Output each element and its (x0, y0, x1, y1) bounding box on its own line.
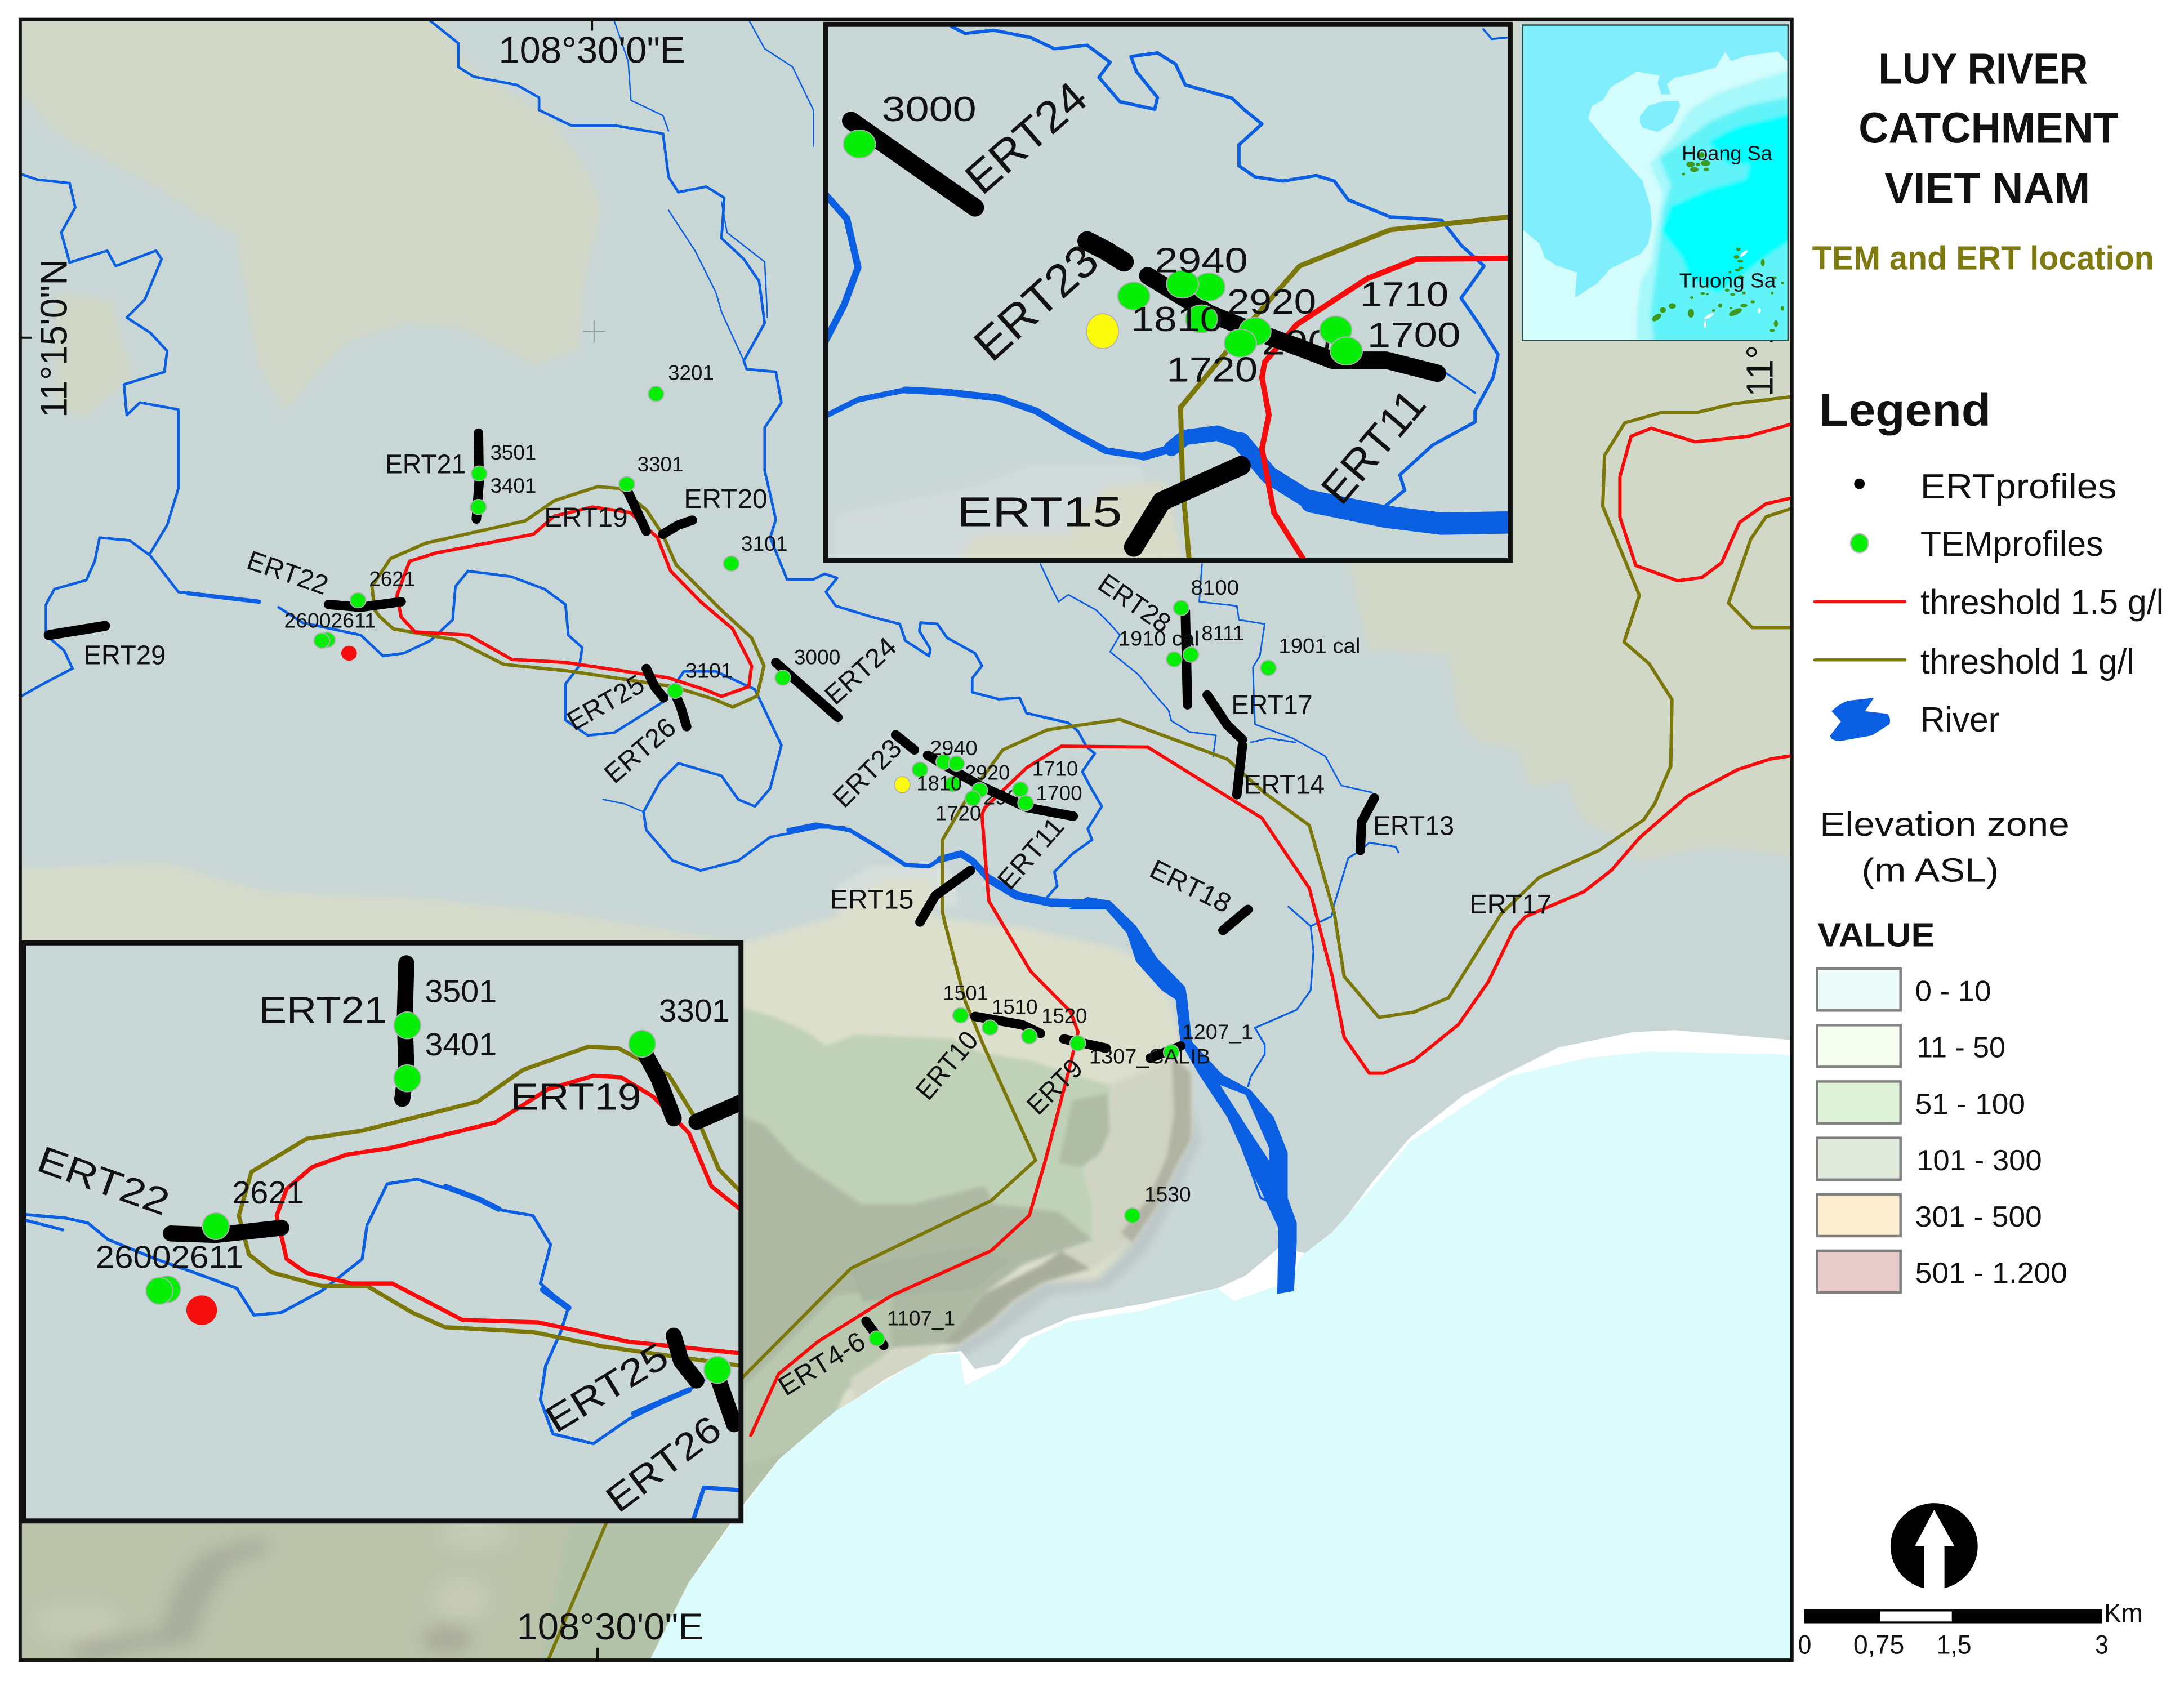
main map ERT labels: ERT25 (562, 669, 649, 737)
inset 2 threshold 1 g/l (239, 1047, 745, 1366)
inset 2 labels: 26002611 (96, 1240, 244, 1276)
locator frame (1522, 25, 1788, 341)
scale bar (1798, 1598, 2143, 1660)
scale labels: 3 (2095, 1630, 2108, 1660)
inset 1 ERT lines (851, 121, 1437, 547)
main map number labels: 2621 (369, 567, 415, 591)
inset 1 labels (882, 72, 1460, 535)
legend symbol: TEM profiles (1851, 534, 1869, 552)
scale labels: 0,75 (1853, 1630, 1904, 1660)
main map ERT labels: ERT24 (819, 631, 902, 711)
inset 2 frame (24, 943, 741, 1521)
legend label: threshold 1 g/l: threshold 1 g/l (1920, 643, 2134, 681)
river delta channels (1175, 998, 1297, 1294)
sea depth tones (1637, 70, 1797, 348)
legend symbol: ERT profiles (1854, 479, 1865, 489)
inset 1 hidden label 2901: 2901 (1262, 323, 1354, 362)
scale labels: 0 (1798, 1630, 1811, 1660)
main map number labels: 1910 cal (1118, 627, 1199, 650)
main map ERT labels: ERT28 (1093, 568, 1176, 639)
land (1518, 21, 1797, 298)
main map number labels: 1720 (935, 801, 981, 825)
threshold 1 g/l lines (372, 397, 1790, 1660)
main map ERT labels: ERT14 (1244, 770, 1325, 800)
legend symbol: river (1830, 698, 1890, 741)
inset 2 labels (32, 974, 730, 1520)
scale labels: 1,5 (1937, 1630, 1972, 1660)
inset: west zoom (23, 943, 752, 1522)
inset 1 labels: ERT23 (964, 234, 1108, 371)
inset 1 labels: ERT24 (955, 72, 1097, 204)
inset 1 labels: 1710 (1360, 275, 1448, 314)
islands (1651, 152, 1784, 332)
locator content (1518, 21, 1797, 348)
main map number labels: 1107_1 (887, 1306, 955, 1330)
legend symbol: threshold 1.5 g/l (1815, 601, 1905, 603)
inset 1 terrain (836, 467, 1184, 560)
title block: LUY RIVER (1878, 45, 2088, 93)
inset 2 TEM points (146, 1012, 730, 1383)
inset 2 labels: ERT19 (510, 1077, 641, 1118)
elevation labels: 0 - 10 (1915, 975, 1991, 1008)
main map ERT labels: ERT22 (243, 545, 332, 601)
main map number labels: 26002611 (284, 609, 376, 632)
locator labels (1679, 142, 1776, 292)
main map number labels: 8111 (1201, 621, 1244, 645)
inset 2 content (23, 943, 752, 1522)
sea and coast (648, 1030, 1797, 1664)
main map ERT labels: ERT17 (1469, 889, 1552, 920)
inset 2 river (25, 1179, 741, 1521)
main map number labels: 1810 (916, 772, 962, 795)
value heading: VALUE (1818, 916, 1935, 954)
graticule ticks (21, 20, 598, 1660)
main map ERT labels: ERT29 (83, 640, 166, 671)
locator labels: Hoang Sa (1682, 142, 1772, 164)
main map ERT labels: ERT9 (1021, 1053, 1089, 1121)
title block: VIET NAM (1884, 165, 2090, 213)
elevation labels (1915, 975, 2067, 1290)
main map number labels (284, 360, 1360, 1330)
coordinate labels: 11°15'0"N (34, 259, 75, 418)
inset 2 labels: ERT21 (259, 989, 387, 1031)
main map number labels: 3000 (794, 645, 840, 669)
main map number labels: 1501 (943, 981, 988, 1005)
inset: north-east zoom (824, 24, 1518, 564)
partly hidden label 2901: 2901 (983, 786, 1031, 809)
icon: north arrow (1891, 1503, 1978, 1590)
elevation swatches (1817, 969, 1901, 1292)
inset 2 labels: 3501 (425, 974, 497, 1009)
inset 2 threshold 1.5 g/l (277, 1076, 745, 1354)
main map ERT labels: ERT17 (1231, 690, 1313, 720)
elevation heading: Elevation zone (1820, 805, 2070, 843)
inset 1 labels: ERT11 (1312, 380, 1436, 513)
title block (1858, 45, 2119, 213)
main map number labels: 3201 (668, 360, 714, 384)
map frame (20, 20, 1792, 1660)
main map ERT labels: ERT20 (684, 484, 768, 514)
inset 1 frame (826, 24, 1510, 560)
legend label: river: River (1920, 701, 2000, 739)
scale labels (1798, 1598, 2143, 1660)
inset 2 labels: 3401 (425, 1027, 497, 1063)
thick lower river reach (1068, 897, 1188, 1000)
inset 1 labels: 1700 (1367, 316, 1460, 355)
inset 2 ERT lines (171, 963, 752, 1424)
main map ERT labels: ERT19 (544, 502, 628, 533)
main map number labels: 3501 (491, 440, 536, 464)
locator labels: Truong Sa (1679, 270, 1776, 292)
main map number labels: 1530 (1144, 1182, 1191, 1206)
inset 1 rivers (824, 26, 1518, 524)
TEM profile points (314, 386, 1276, 1346)
inset 2 red point (186, 1295, 217, 1325)
main map number labels: 1710 (1032, 757, 1078, 781)
main map number labels: 1901 cal (1278, 634, 1360, 657)
inset 1 TEM points (844, 130, 1362, 365)
main map ERT labels (83, 449, 1552, 1402)
coordinate labels: 11°15'0"N (1739, 238, 1781, 397)
main map number labels: 3401 (491, 474, 536, 497)
title block: CATCHMENT (1858, 105, 2119, 153)
inset 2 labels: 2621 (233, 1175, 304, 1211)
ERT profile lines (49, 433, 1374, 1345)
main map ERT labels: ERT26 (599, 712, 682, 790)
elevation unit: (m ASL) (1862, 851, 1999, 889)
inset 1 labels: 2940 (1155, 242, 1248, 280)
inset 1 yellow point (1086, 314, 1118, 349)
inset 1 threshold 1.5 g/l (1262, 258, 1518, 564)
terrain elevation shading (14, 14, 1797, 1518)
main map number labels: 1307_CALIB (1089, 1045, 1210, 1068)
scale labels: Km (2104, 1598, 2143, 1628)
inset 2 labels: 3301 (659, 993, 730, 1029)
main map ERT labels: ERT4-6 (773, 1326, 871, 1402)
inset: regional locator map (1518, 21, 1797, 348)
main map number labels: 1700 (1036, 781, 1082, 805)
main map number labels: 3101 (741, 532, 788, 555)
main map ERT labels: ERT18 (1145, 854, 1236, 919)
inset 1 labels: 1720 (1166, 351, 1258, 390)
main map ERT labels: ERT15 (830, 885, 913, 915)
main map number labels: 1520 (1041, 1004, 1087, 1027)
crosshair mark (583, 320, 605, 342)
subtitle: TEM and ERT location (1812, 239, 2154, 277)
legend label: threshold 1.5 g/l: threshold 1.5 g/l (1920, 583, 2164, 622)
main map ERT labels: ERT11 (992, 811, 1070, 895)
coordinate labels (34, 29, 1781, 1647)
main map ERT labels: ERT21 (385, 449, 466, 479)
elevation labels: 51 - 100 (1915, 1088, 2025, 1121)
main map number labels: 2920 (965, 761, 1010, 784)
legend heading: Legend (1819, 385, 1991, 436)
legend symbol: threshold 1 g/l (1815, 659, 1905, 661)
red calibration point (341, 646, 357, 661)
Hainan island (1640, 101, 1680, 132)
thin rivers north and west (21, 21, 1398, 1086)
elevation labels: 301 - 500 (1915, 1201, 2042, 1233)
elevation labels: 501 - 1.200 (1915, 1257, 2067, 1290)
inset 1 content (824, 24, 1518, 564)
terrain dark and light patches (49, 1526, 496, 1658)
inset 2 labels: ERT22 (32, 1139, 175, 1224)
main river Luy (788, 824, 1297, 1294)
main map number labels: 1510 (992, 995, 1038, 1019)
lowland base (21, 21, 1790, 1369)
inset 1 labels: 2920 (1227, 283, 1316, 322)
main map number labels: 2940 (930, 736, 978, 760)
main map number labels: 8100 (1191, 576, 1239, 599)
elevation labels: 101 - 300 (1916, 1144, 2042, 1177)
main map ERT labels: ERT23 (827, 733, 907, 814)
white reef specks (1704, 249, 1761, 328)
main map number labels: 3301 (638, 452, 683, 476)
legend (1815, 385, 2164, 741)
inset 1 labels: 1810 (1131, 300, 1223, 339)
main map number labels: 1207_1 (1182, 1020, 1253, 1044)
coordinate labels: 108°30'0"E (498, 29, 685, 70)
inset 2 labels: ERT26 (599, 1408, 729, 1520)
yellow calibration point (894, 777, 910, 793)
legend label: TEM profiles: TEMprofiles (1920, 525, 2103, 564)
inset 1 threshold 1 g/l (1180, 216, 1518, 564)
inset 2 labels: ERT25 (538, 1335, 676, 1441)
coordinate labels: 108°30'0"E (517, 1606, 703, 1647)
main map ERT labels: ERT13 (1373, 811, 1454, 841)
elevation labels: 11 - 50 (1916, 1032, 2005, 1064)
main map ERT labels: ERT10 (910, 1025, 984, 1105)
legend label: ERT profiles: ERTprofiles (1920, 467, 2117, 506)
main map number labels: 3101 (685, 658, 733, 682)
elevation zone legend (1817, 805, 2070, 1292)
inset 1 labels: ERT15 (956, 488, 1122, 535)
inset 1 labels: 3000 (882, 90, 977, 129)
threshold 1.5 g/l lines (397, 425, 1790, 1435)
